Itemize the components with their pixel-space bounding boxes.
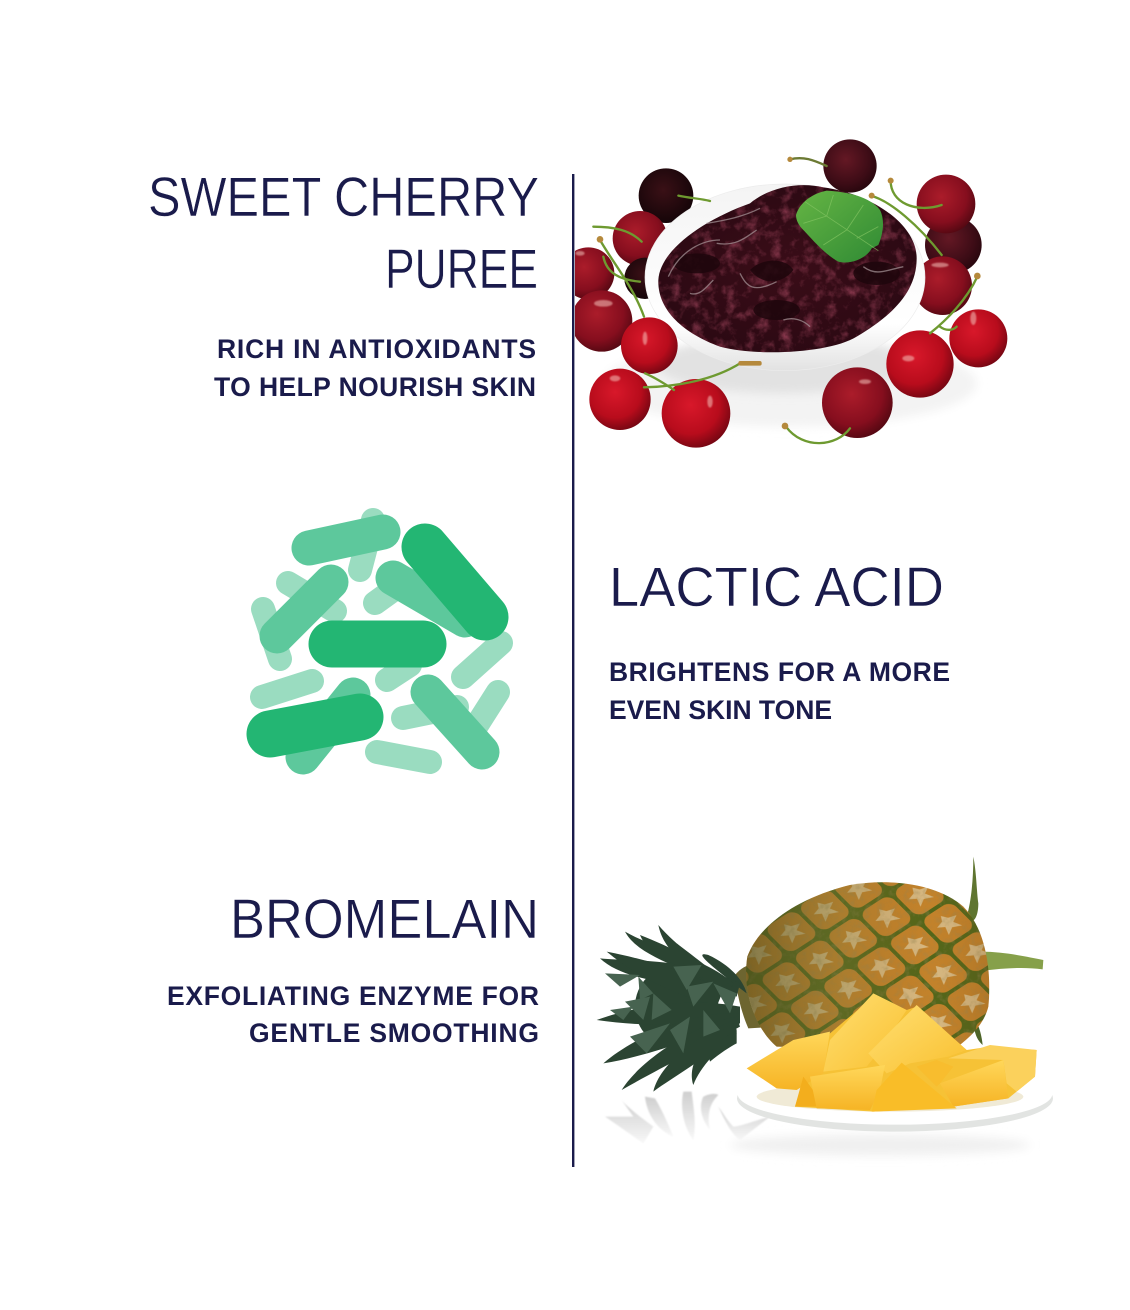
centre divider line [572, 174, 574, 1167]
cherry stems [593, 158, 977, 443]
text: lactic acid benefit [609, 657, 950, 725]
text: bromelain benefit [167, 981, 539, 1048]
medium bacteria [277, 532, 482, 757]
cherries behind bowl [562, 139, 982, 352]
panel: lactic acid text [609, 555, 950, 725]
text: bromelain benefit: EXFOLIATING ENZYME FOR [167, 981, 539, 1011]
puree [658, 185, 917, 352]
pineapple chunks [747, 993, 1037, 1112]
panel: sweet cherry puree text [148, 165, 539, 402]
text: cherry benefit: TO HELP NOURISH SKIN [214, 372, 536, 402]
stem tips [597, 157, 981, 429]
crown leaf highlights [605, 965, 737, 1053]
bowl [645, 184, 925, 371]
side stubs [967, 857, 1043, 1045]
pineapple neck [735, 965, 780, 1028]
mint leaf [796, 191, 883, 263]
cherries in front [589, 309, 1007, 448]
heading: bromelain: BROMELAIN [230, 887, 539, 950]
icon: lactic acid bacteria [262, 520, 501, 762]
text: cherry benefit [214, 334, 536, 402]
light bacteria [262, 520, 501, 762]
panel: bromelain text [167, 887, 539, 1048]
image: bowl of cherry puree surrounded by cherries [562, 139, 1007, 448]
text: lactic acid benefit: BRIGHTENS FOR A MORE [609, 657, 950, 687]
text: bromelain benefit: GENTLE SMOOTHING [249, 1018, 539, 1048]
dark bacteria [270, 547, 485, 734]
plate [737, 1063, 1053, 1132]
heading: lactic acid: LACTIC ACID [609, 555, 944, 618]
text: cherry benefit: RICH IN ANTIOXIDANTS [217, 334, 536, 364]
image: pineapple with plate of chunks [597, 857, 1053, 1156]
pineapple body [746, 882, 990, 1047]
cherry highlights [575, 251, 976, 408]
heading: sweet cherry puree: PUREE [385, 237, 538, 300]
heading: sweet cherry puree: SWEET CHERRY [148, 165, 539, 228]
crown leaves [597, 925, 747, 1092]
reflection [605, 1092, 770, 1143]
heading: sweet cherry puree [148, 165, 539, 300]
text: lactic acid benefit: EVEN SKIN TONE [609, 695, 832, 725]
